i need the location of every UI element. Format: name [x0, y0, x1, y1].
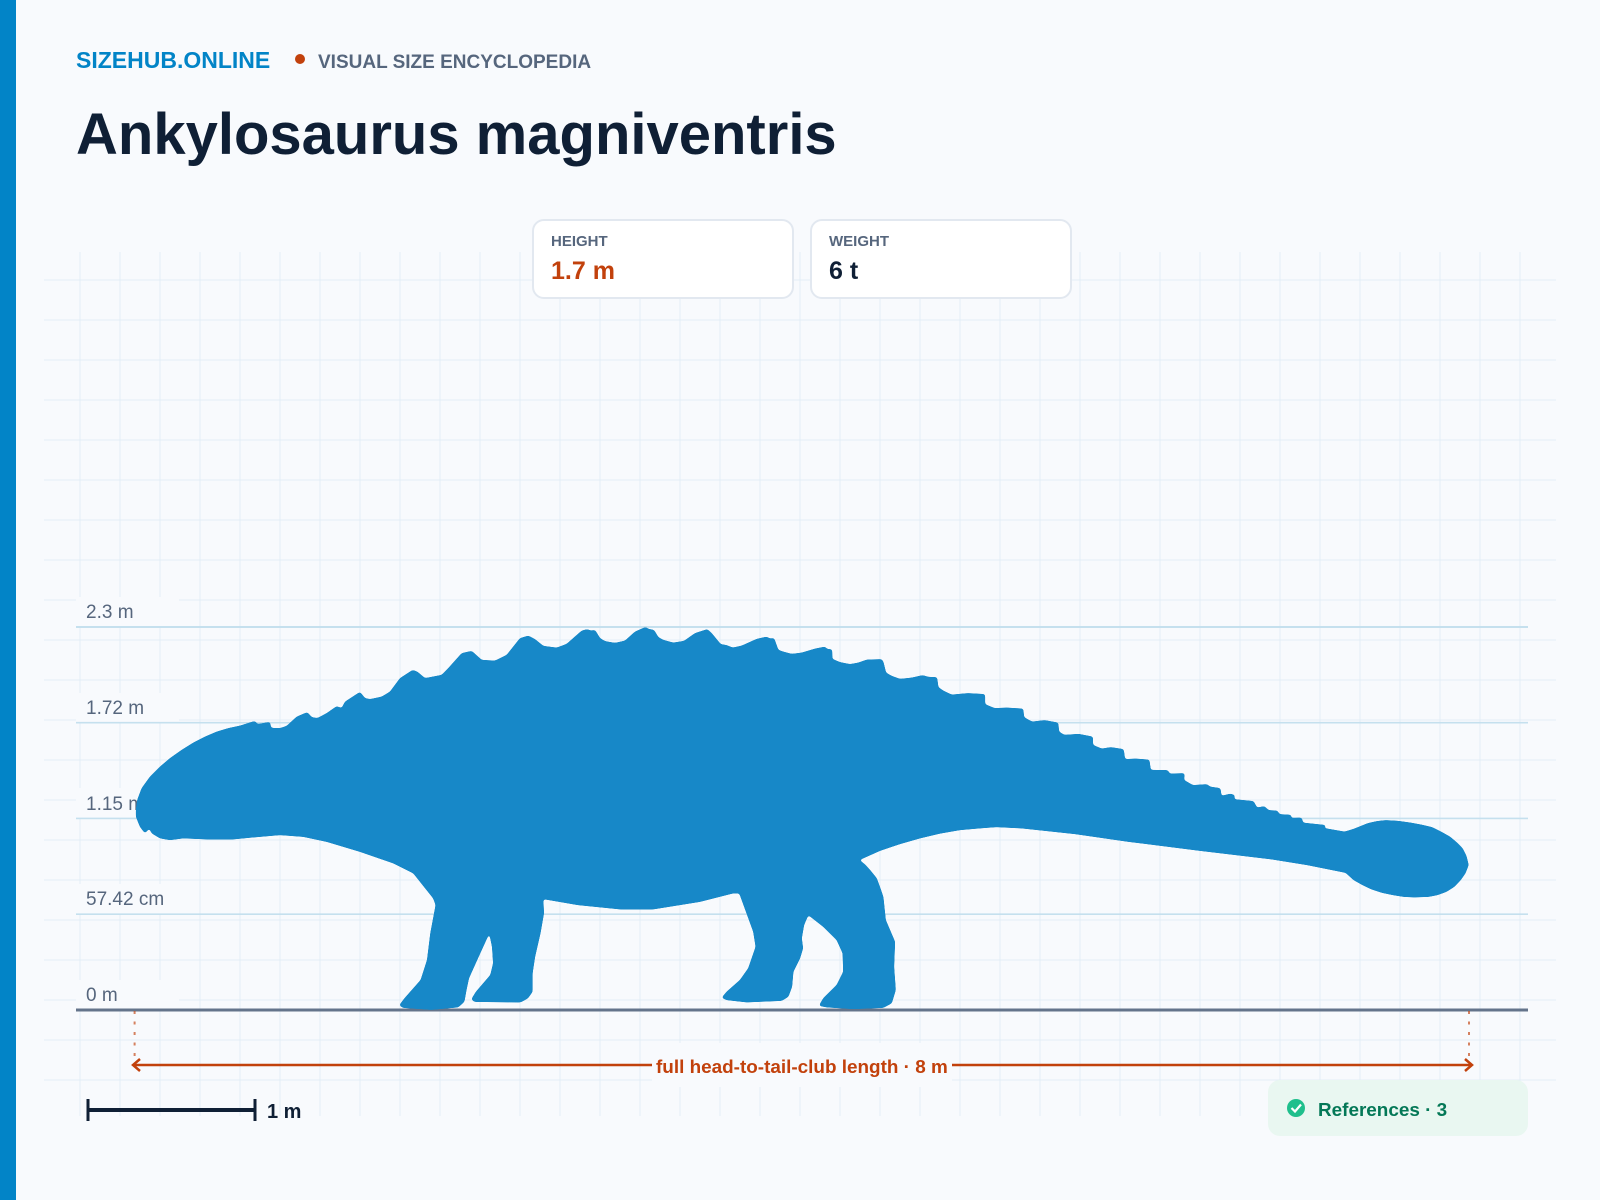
- height reference line: 57.42 cm: [76, 884, 1528, 914]
- length arrow with label: full head-to-tail-club length · 8 m: [656, 1057, 948, 1078]
- header: brand and tagline: VISUAL SIZE ENCYCLOPEDIA: [318, 52, 591, 73]
- length arrow with label: [133, 1043, 1472, 1087]
- scale bar: [88, 1099, 301, 1123]
- height reference line: 2.3 m: [76, 597, 1528, 627]
- scale bar: 1 m: [267, 1101, 301, 1123]
- references badge: [1268, 1080, 1528, 1136]
- references badge: References · 3: [1318, 1100, 1447, 1121]
- header: brand and tagline: [76, 47, 591, 73]
- stat card: weight: WEIGHT: [829, 233, 889, 250]
- left accent bar: [0, 0, 16, 1200]
- stat card: height: [533, 220, 793, 298]
- stat card: weight: 6 t: [829, 257, 859, 285]
- stat card: weight: [811, 220, 1071, 298]
- title: Ankylosaurus magniventris: [76, 102, 837, 167]
- height reference line: 2.3 m: 2.3 m: [86, 602, 134, 623]
- header: brand and tagline: SIZEHUB.ONLINE: [76, 47, 270, 73]
- height reference line: 1.15 m: [76, 788, 1528, 818]
- height reference line: 57.42 cm: 57.42 cm: [86, 889, 164, 910]
- left dotted extent marker: [134, 1011, 136, 1056]
- height reference line: 1.15 m: 1.15 m: [86, 794, 144, 815]
- ground line: 0 m: 0 m: [86, 985, 118, 1006]
- height reference line: 1.72 m: [76, 693, 1528, 723]
- height reference line: 1.72 m: 1.72 m: [86, 698, 144, 719]
- icon: check mark: [1287, 1099, 1305, 1117]
- stat card: height: HEIGHT: [551, 233, 608, 250]
- stat card: height: 1.7 m: [551, 257, 615, 285]
- ground line: 0 m: [76, 980, 1528, 1010]
- right dotted extent marker: [1468, 1011, 1470, 1056]
- ankylosaurus silhouette: [136, 627, 1469, 1010]
